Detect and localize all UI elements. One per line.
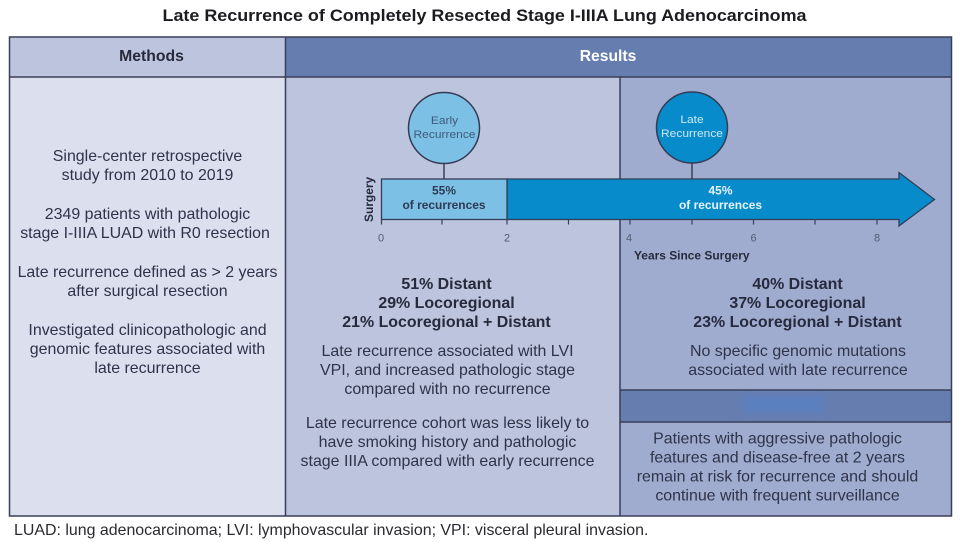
axis title: surgery: Surgery xyxy=(363,176,376,222)
axis title: years since surgery: Years Since Surgery xyxy=(634,250,750,262)
text block: methods details: Single-center retrospective xyxy=(53,148,242,165)
axis labels: 2 xyxy=(504,232,510,244)
text block: conclusion xyxy=(637,431,918,504)
axis labels: 4 xyxy=(626,232,632,244)
text block: conclusion: features and disease-free at 2 years xyxy=(650,450,905,466)
text block: late findings: associated with late recurrence xyxy=(688,362,908,379)
axis labels: 8 xyxy=(874,232,880,244)
text block: methods details: genomic features associated with xyxy=(30,341,265,358)
title: Late Recurrence of Completely Resected Stage I-IIIA Lung Adenocarcinoma xyxy=(163,6,807,25)
text block: methods details: after surgical resection xyxy=(67,283,228,300)
bar label: 55 percent: 55% xyxy=(432,185,457,197)
stats: early recurrence pattern: 29% Locoregional xyxy=(378,295,515,312)
bar: early recurrence xyxy=(382,179,507,220)
icon: late recurrence circle xyxy=(656,92,728,179)
heading: methods: Methods xyxy=(119,48,184,65)
axis ticks xyxy=(382,220,877,224)
text block: methods details: study from 2010 to 2019 xyxy=(62,167,233,184)
text block: early findings: have smoking history and pathologic xyxy=(319,434,577,451)
stats: late recurrence pattern xyxy=(693,276,902,331)
text block: methods details: stage I-IIIA LUAD with R0 resection xyxy=(20,225,270,242)
text block: methods details xyxy=(18,148,278,377)
text block: late findings: No specific genomic mutations xyxy=(690,343,906,360)
text block: early findings: stage IIIA compared with early recurrence xyxy=(301,453,594,470)
timeline chart xyxy=(363,92,934,262)
bar label: 45 percent: 45% xyxy=(709,185,733,197)
text block: methods details: 2349 patients with pathologic xyxy=(45,206,250,223)
text block: late findings xyxy=(688,343,908,379)
heading: results: Results xyxy=(580,48,636,65)
bar label: 55 percent xyxy=(402,185,486,212)
icon: late recurrence circle: Recurrence xyxy=(661,128,723,140)
panel: results xyxy=(286,37,952,516)
icon: early recurrence circle: Recurrence xyxy=(414,129,475,141)
stats: early recurrence pattern: 21% Locoregional + Distant xyxy=(342,314,551,331)
text block: methods details: Investigated clinicopathologic and xyxy=(28,322,267,339)
text block: early findings: compared with no recurrence xyxy=(344,381,551,398)
text block: conclusion: continue with frequent surveillance xyxy=(655,488,900,504)
panel: methods xyxy=(10,37,286,516)
text block: conclusion: Patients with aggressive pathologic xyxy=(653,431,902,447)
icon: early recurrence circle xyxy=(408,92,480,179)
text block: early findings: VPI, and increased pathologic stage xyxy=(320,362,575,379)
arrow: late recurrence xyxy=(507,172,934,226)
text block: methods details: late recurrence xyxy=(94,360,201,377)
text block: methods details: Late recurrence defined as > 2 years xyxy=(18,264,278,281)
stats: late recurrence pattern: 23% Locoregional + Distant xyxy=(693,314,902,331)
bar label: 45 percent xyxy=(679,185,762,212)
footnote: LUAD: lung adenocarcinoma; LVI: lymphovascular invasion; VPI: visceral pleural invasion. xyxy=(14,522,648,539)
stats: late recurrence pattern: 40% Distant xyxy=(752,276,843,293)
bar label: 45 percent: of recurrences xyxy=(679,199,762,212)
text block: early findings xyxy=(301,343,594,470)
stats: early recurrence pattern xyxy=(342,276,551,331)
icon: late recurrence circle: Late xyxy=(680,114,704,126)
axis labels: 6 xyxy=(750,232,757,244)
text block: early findings: Late recurrence cohort was less likely to xyxy=(306,415,589,432)
stats: late recurrence pattern: 37% Locoregional xyxy=(729,295,866,312)
stats: early recurrence pattern: 51% Distant xyxy=(401,276,492,293)
text block: early findings: Late recurrence associated with LVI xyxy=(321,343,574,360)
bar label: 55 percent: of recurrences xyxy=(402,199,486,212)
axis labels xyxy=(378,232,880,244)
text block: conclusion: remain at risk for recurrence and should xyxy=(637,469,918,485)
axis labels: 0 xyxy=(378,232,384,244)
icon: early recurrence circle: Early xyxy=(431,115,458,127)
